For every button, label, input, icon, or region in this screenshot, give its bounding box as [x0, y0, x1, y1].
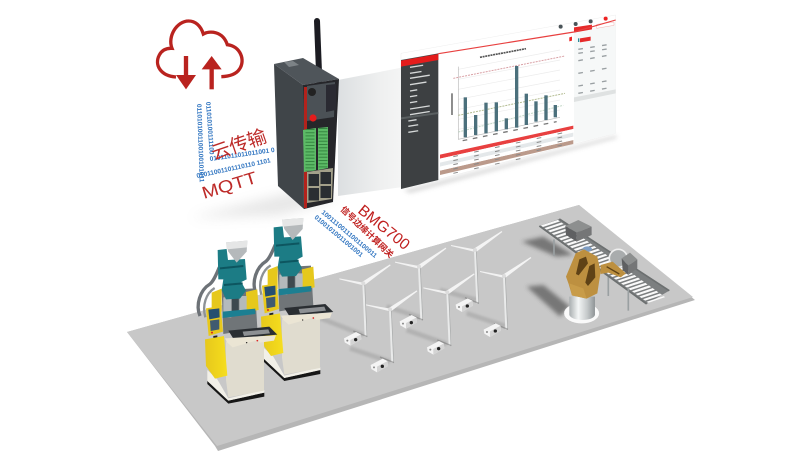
wind turbine 6: [480, 257, 531, 329]
device floor shadow: [190, 190, 340, 218]
wind turbine 5: [423, 273, 475, 346]
chart side buttons: [569, 37, 572, 41]
floor platform: [127, 205, 695, 451]
binary data stream: cloud transfer: [195, 102, 275, 183]
binary data stream: gateway to floor: 01001010011001001: [313, 214, 364, 259]
sensor box 4: [371, 359, 388, 372]
robot and conveyor cell: [522, 219, 669, 324]
turbine shadows: [317, 290, 505, 362]
top red rule: [438, 20, 616, 54]
device front: [303, 79, 339, 209]
red antenna connector: [309, 114, 317, 122]
top toolbar icons: [559, 17, 608, 29]
sensor box 1: [344, 332, 361, 346]
dashboard screen: [401, 15, 617, 193]
sensor box 5: [427, 341, 444, 355]
turbine group: [317, 231, 531, 372]
device top: [274, 58, 339, 85]
binary data stream: cloud transfer: 01011011011011001 0: [209, 147, 275, 163]
sensor box 3: [456, 298, 473, 312]
gateway device: [274, 21, 339, 209]
projection beam from gateway to dashboard: [338, 66, 410, 196]
binary data stream: cloud transfer: 01011001101110110 1101: [196, 157, 272, 180]
chart title: [480, 49, 526, 57]
wind turbine 3: [451, 231, 502, 303]
icon: cloud upload and download: [158, 21, 242, 89]
label: BMG700: BMG700: [354, 202, 413, 254]
ethernet ports: [307, 168, 333, 203]
right settings panel: [574, 22, 616, 143]
sidebar navigation: [401, 53, 438, 189]
wind turbine 4: [366, 290, 417, 363]
cargo box rear: [565, 220, 592, 242]
device side: [274, 64, 304, 209]
binary data stream: cloud transfer: 011010100111100: [204, 102, 215, 155]
red front strip: [304, 87, 307, 208]
injection moulding machine rear: [254, 218, 333, 381]
bar chart: [452, 49, 565, 141]
wind turbine 2: [395, 248, 446, 320]
dashboard shadow: [403, 135, 617, 193]
robot arm: [566, 246, 626, 299]
data table: [440, 126, 573, 175]
label: MQTT: MQTT: [199, 168, 259, 203]
antenna: [317, 21, 320, 98]
label: signal edge computing gateway: 信号边缘计算网关: [339, 204, 396, 260]
dashboard panel: [401, 15, 616, 189]
ring fixture: [609, 249, 627, 267]
sensor box 2: [400, 315, 417, 329]
conveyor belt: [539, 219, 669, 304]
top connectors: [284, 61, 299, 67]
robot base: [564, 297, 599, 324]
conveyor leg front: [626, 287, 631, 311]
conveyor legs rear: [554, 239, 608, 296]
binary data stream: cloud transfer: 0110101001100100101011: [195, 104, 205, 183]
sensor box 6: [484, 323, 501, 337]
cell shadows: [522, 237, 573, 317]
top panel: [307, 82, 335, 121]
binary data stream: gateway to floor: 10011100111001100011: [320, 209, 378, 260]
green terminal blocks: [303, 127, 328, 172]
cargo box front: [622, 253, 637, 275]
wind turbine 1: [339, 264, 391, 337]
label: cloud transfer: 云传输: [208, 125, 270, 165]
injection moulding machine front: [198, 241, 277, 404]
